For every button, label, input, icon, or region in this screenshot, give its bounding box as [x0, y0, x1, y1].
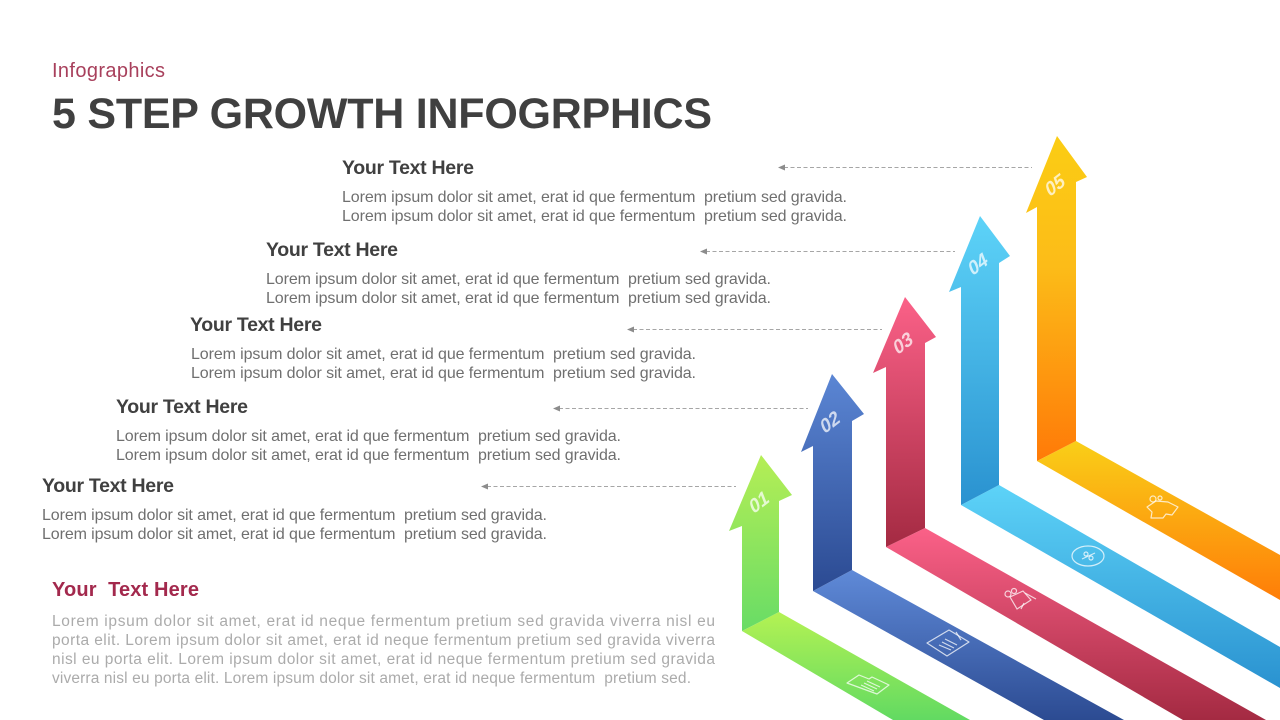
- text block 1: Lorem ipsum dolor sit amet, erat id que fermentum pretium sed gravida.: [42, 526, 547, 543]
- title: 5 STEP GROWTH INFOGRPHICS: [52, 90, 712, 138]
- growth arrow 02: 02: [816, 407, 845, 438]
- text block 4: Your Text Here: [266, 239, 398, 261]
- arrow: pointer 3: [627, 326, 882, 332]
- growth arrow 03: [873, 297, 1266, 720]
- text block 2: Lorem ipsum dolor sit amet, erat id que fermentum pretium sed gravida.: [116, 428, 621, 445]
- subtitle: Infographics: [52, 60, 165, 82]
- arrow: pointer 1: [481, 484, 736, 490]
- arrow: pointer 5: [778, 164, 1032, 170]
- icon: notepad: [927, 630, 969, 656]
- growth arrow 05: [1026, 136, 1280, 600]
- text block 5: Lorem ipsum dolor sit amet, erat id que fermentum pretium sed gravida.: [342, 189, 847, 206]
- growth arrow 05: 05: [1041, 170, 1070, 201]
- summary paragraph: [52, 613, 715, 687]
- summary paragraph: Lorem ipsum dolor sit amet, erat id neque fermentum pretium sed gravida viverra nisl eu: [52, 613, 715, 630]
- icon: percent circle: [1072, 546, 1104, 566]
- icon: piggy bank: [1147, 496, 1178, 518]
- text block 3: Lorem ipsum dolor sit amet, erat id que fermentum pretium sed gravida.: [191, 346, 696, 363]
- icon: people: [1005, 588, 1036, 609]
- text block 4: Lorem ipsum dolor sit amet, erat id que fermentum pretium sed gravida.: [266, 271, 771, 288]
- growth arrow 02: [801, 374, 1124, 720]
- growth arrow 04: 04: [964, 249, 993, 280]
- text block 2: Your Text Here: [116, 396, 248, 418]
- text block 3: [190, 314, 696, 382]
- summary paragraph: porta elit. Lorem ipsum dolor sit amet, erat id neque fermentum pretium sed gravida viverra: [52, 632, 715, 649]
- text block 1: Lorem ipsum dolor sit amet, erat id que fermentum pretium sed gravida.: [42, 507, 547, 524]
- text block 1: Your Text Here: [42, 475, 174, 497]
- text block 4: Lorem ipsum dolor sit amet, erat id que fermentum pretium sed gravida.: [266, 290, 771, 307]
- arrow: pointer 4: [700, 248, 955, 254]
- growth arrow 01: 01: [745, 487, 773, 518]
- text block 2: Lorem ipsum dolor sit amet, erat id que fermentum pretium sed gravida.: [116, 447, 621, 464]
- text block 5: Lorem ipsum dolor sit amet, erat id que fermentum pretium sed gravida.: [342, 208, 847, 225]
- arrow: pointer 2: [553, 406, 808, 412]
- text block 5: Your Text Here: [342, 157, 474, 179]
- icon: document: [847, 675, 889, 694]
- text block 4: [266, 239, 771, 307]
- growth arrow 01: [729, 455, 970, 720]
- text block 2: [116, 396, 621, 464]
- text block 3: Your Text Here: [190, 314, 322, 336]
- text block 1: [42, 475, 547, 543]
- growth arrow 03: 03: [889, 328, 918, 359]
- summary heading: Your Text Here: [52, 579, 199, 601]
- summary paragraph: nisl eu porta elit. Lorem ipsum dolor sit amet, erat id neque fermentum pretium sed gravida: [52, 651, 715, 668]
- growth arrow 04: [949, 216, 1280, 688]
- summary paragraph: viverra nisl eu porta elit. Lorem ipsum dolor sit amet, erat id neque fermentum pretium sed.: [52, 670, 691, 687]
- text block 5: [342, 157, 847, 225]
- text block 3: Lorem ipsum dolor sit amet, erat id que fermentum pretium sed gravida.: [191, 365, 696, 382]
